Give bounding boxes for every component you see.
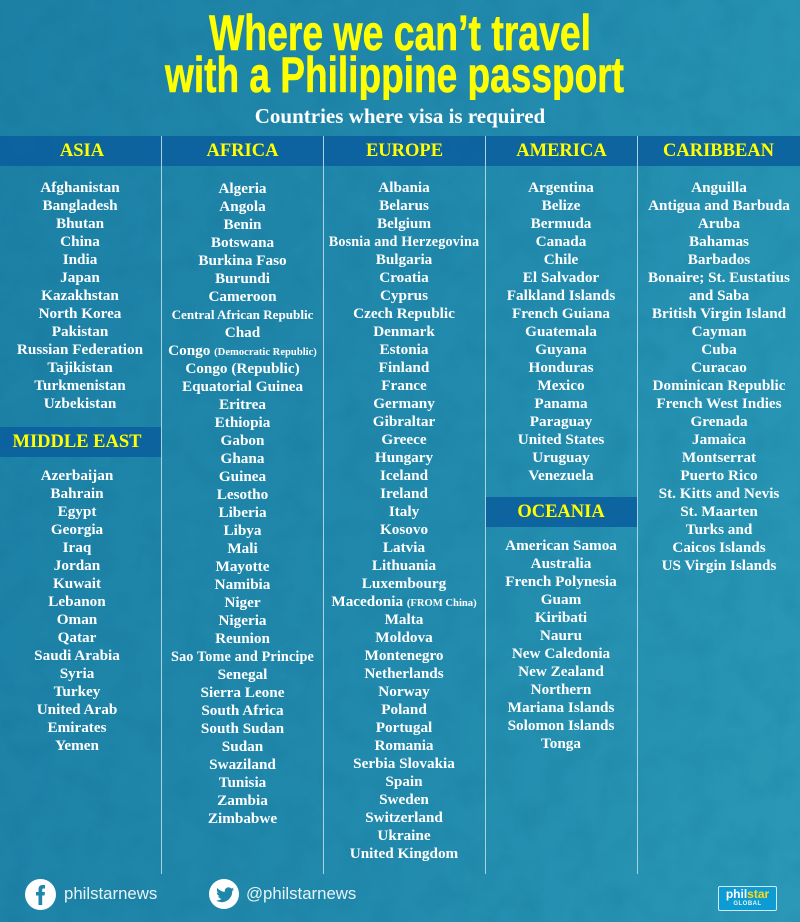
panel: Asia list: Bhutan (56, 215, 104, 232)
panel: Europe list: United Kingdom (350, 845, 458, 862)
panel: Africa list (168, 180, 317, 827)
panel: Europe list: Serbia Slovakia (353, 755, 455, 772)
panel: Oceania list: Guam (541, 591, 581, 608)
panel: America list: Belize (542, 197, 580, 214)
panel: Caribbean list: Anguilla (691, 179, 747, 196)
panel: Africa list: Sao Tome and Principe (171, 649, 314, 665)
panel: Europe list: Belarus (379, 197, 429, 214)
panel: Africa list: Niger (224, 594, 261, 611)
panel: Asia list: Uzbekistan (44, 395, 116, 412)
panel: Africa list: Zimbabwe (208, 810, 277, 827)
panel: Africa list: Equatorial Guinea (182, 378, 303, 395)
panel: Caribbean list: Turks and (686, 521, 752, 538)
panel: Europe list: Romania (374, 737, 434, 754)
panel: Europe list: Sweden (379, 791, 429, 808)
panel: Europe list: Spain (385, 773, 423, 790)
panel: America list: Guyana (535, 341, 587, 358)
panel: Africa list: Guinea (219, 468, 266, 485)
panel: America list (507, 179, 615, 484)
twitter handle: @philstarnews (246, 884, 356, 903)
panel: Europe list: Denmark (373, 323, 435, 340)
panel: Europe list (328, 179, 479, 862)
panel: Africa list: Mali (227, 540, 258, 557)
panel: Africa list: Cameroon (208, 288, 277, 305)
panel: Europe heading: EUROPE (366, 141, 443, 161)
panel: Europe list: Finland (379, 359, 429, 376)
panel: Middle East list: Oman (57, 611, 97, 628)
panel: Oceania list: American Samoa (505, 537, 617, 554)
panel: Oceania list: New Zealand (518, 663, 604, 680)
panel: Asia list: Bangladesh (42, 197, 118, 214)
panel: America list: Venezuela (528, 467, 594, 484)
panel: Africa list: Lesotho (217, 486, 268, 503)
panel: Africa list: Botswana (211, 234, 274, 251)
panel: Asia list: Pakistan (52, 323, 108, 340)
panel: Africa list: Gabon (221, 432, 264, 449)
panel: Africa list: Mayotte (216, 558, 269, 575)
panel: America list: Argentina (528, 179, 594, 196)
panel: Africa list: Namibia (215, 576, 270, 593)
panel: Africa list: Liberia (218, 504, 267, 521)
panel: Caribbean list: and Saba (689, 287, 749, 304)
panel: America list: Uruguay (532, 449, 590, 466)
panel: Oceania list: Northern (531, 681, 591, 698)
panel: Africa list: Congo (Republic) (185, 360, 300, 377)
panel: Caribbean list: Bonaire; St. Eustatius (648, 269, 790, 286)
panel: Europe list: Ireland (380, 485, 428, 502)
panel: Europe list: Montenegro (364, 647, 444, 664)
panel: Middle East list: Saudi Arabia (34, 647, 120, 664)
panel: Africa list: Tunisia (219, 774, 266, 791)
panel: America list: Bermuda (531, 215, 591, 232)
panel: Europe list: Luxembourg (362, 575, 446, 592)
panel: Europe list: Latvia (383, 539, 425, 556)
panel: Europe list: Hungary (375, 449, 433, 466)
panel: Europe list: Germany (373, 395, 435, 412)
panel: Middle East list (34, 467, 120, 754)
panel: Africa list: Swaziland (209, 756, 276, 773)
panel: Asia list: Russian Federation (17, 341, 143, 358)
icon: facebook (25, 879, 56, 910)
panel: Africa list: South Sudan (201, 720, 284, 737)
panel: Oceania heading (486, 497, 637, 527)
panel: Middle East list: Georgia (51, 521, 103, 538)
panel: Middle East heading (0, 427, 161, 457)
logo: philstar global: philstar (726, 887, 769, 901)
panel: Africa list: Chad (225, 324, 260, 341)
panel: Europe list: Estonia (380, 341, 428, 358)
panel: Europe list: Moldova (375, 629, 433, 646)
panel: Europe list: Belgium (377, 215, 431, 232)
panel: Caribbean list: St. Kitts and Nevis (659, 485, 779, 502)
panel: Caribbean list: US Virgin Islands (662, 557, 776, 574)
panel: Middle East list: Kuwait (53, 575, 101, 592)
panel: Middle East list: Iraq (63, 539, 91, 556)
panel: Europe list: Macedonia (FROM China) (331, 593, 477, 610)
panel: Europe list: Bulgaria (376, 251, 432, 268)
panel: Africa list: Burundi (215, 270, 270, 287)
panel: Africa list: Ghana (221, 450, 264, 467)
panel: Europe list: Albania (378, 179, 430, 196)
panel: America list: Canada (536, 233, 586, 250)
panel: Africa list: Algeria (218, 180, 267, 197)
facebook handle: philstarnews (64, 884, 157, 903)
panel: Asia heading: ASIA (60, 141, 104, 161)
panel: Africa list: Nigeria (218, 612, 267, 629)
panel: Middle East list: Emirates (47, 719, 107, 736)
panel: America heading: AMERICA (516, 141, 607, 161)
panel: Asia list: Turkmenistan (34, 377, 126, 394)
panel: Asia list: North Korea (39, 305, 121, 322)
panel: Caribbean list: Grenada (690, 413, 748, 430)
panel: Europe list: Kosovo (380, 521, 428, 538)
panel: Asia list: Japan (60, 269, 100, 286)
title (164, 5, 624, 100)
panel: Caribbean list: Dominican Republic (653, 377, 785, 394)
panel: Asia list: Afghanistan (40, 179, 120, 196)
panel: America list: Panama (534, 395, 588, 412)
panel: Africa list: Burkina Faso (198, 252, 287, 269)
panel: Asia list (17, 179, 143, 412)
header band (0, 136, 800, 166)
panel: Europe list: Netherlands (364, 665, 444, 682)
panel: Caribbean list: Antigua and Barbuda (648, 197, 790, 214)
panel: Africa list: South Africa (201, 702, 284, 719)
panel: Africa list: Ethiopia (215, 414, 270, 431)
panel: America list: Paraguay (530, 413, 592, 430)
panel: Caribbean list: Jamaica (692, 431, 746, 448)
subtitle: Countries where visa is required (255, 104, 545, 128)
panel: Middle East list: Egypt (58, 503, 96, 520)
panel: Africa list: Reunion (215, 630, 270, 647)
panel: Middle East list: Jordan (54, 557, 100, 574)
panel: Europe list: Italy (389, 503, 419, 520)
panel: Caribbean list: Barbados (688, 251, 750, 268)
panel: America list: Falkland Islands (507, 287, 615, 304)
panel: Africa list: Sierra Leone (201, 684, 284, 701)
panel: Africa list: Senegal (218, 666, 267, 683)
panel: Africa list: Central African Republic (172, 307, 313, 322)
panel: Africa list: Congo (Democratic Republic) (168, 342, 317, 359)
panel: Africa list: Eritrea (219, 396, 266, 413)
panel: Caribbean list: British Virgin Island (652, 305, 786, 322)
panel: Europe list: Czech Republic (353, 305, 455, 322)
panel: Europe list: Bosnia and Herzegovina (329, 234, 479, 250)
panel: Oceania list: Tonga (541, 735, 581, 752)
panel: America list: French Guiana (512, 305, 610, 322)
panel: Caribbean list: Aruba (698, 215, 740, 232)
panel: Africa list: Sudan (222, 738, 263, 755)
panel: Asia list: China (60, 233, 100, 250)
panel: Oceania heading: OCEANIA (517, 502, 605, 522)
panel: Middle East list: Syria (60, 665, 94, 682)
panel: Europe list: Greece (381, 431, 427, 448)
panel: Europe list: Lithuania (372, 557, 436, 574)
panel: Oceania list: French Polynesia (505, 573, 617, 590)
panel: Caribbean list (648, 179, 790, 574)
panel: Africa list: Benin (224, 216, 261, 233)
panel: Europe list: Iceland (380, 467, 428, 484)
panel: Europe list: Gibraltar (373, 413, 435, 430)
panel: Caribbean list: Cayman (692, 323, 746, 340)
panel: Oceania list: Kiribati (535, 609, 587, 626)
panel: America list: Guatemala (525, 323, 597, 340)
panel: Oceania list: Nauru (540, 627, 582, 644)
panel: Middle East list: Lebanon (48, 593, 106, 610)
panel: Middle East list: Turkey (54, 683, 100, 700)
panel: Middle East list: Qatar (58, 629, 96, 646)
panel: America list: United States (518, 431, 604, 448)
panel: Caribbean list: St. Maarten (680, 503, 758, 520)
panel: Caribbean list: Montserrat (682, 449, 756, 466)
panel: Europe list: Malta (385, 611, 423, 628)
panel: Europe list: Poland (381, 701, 427, 718)
panel: Europe list: France (381, 377, 427, 394)
panel: Europe list: Ukraine (377, 827, 431, 844)
panel: Middle East heading: MIDDLE EAST (12, 432, 142, 452)
panel: Oceania list: Mariana Islands (508, 699, 614, 716)
panel: Asia list: Tajikistan (47, 359, 113, 376)
panel: Europe list: Portugal (376, 719, 432, 736)
title: Where we can’t travel (209, 5, 591, 61)
panel: Africa heading: AFRICA (207, 141, 278, 161)
panel: Africa list: Zambia (217, 792, 268, 809)
logo: philstar global: GLOBAL (733, 901, 762, 907)
panel: Asia list: India (63, 251, 97, 268)
panel: America list: Mexico (537, 377, 585, 394)
panel: America list: El Salvador (523, 269, 599, 286)
panel: Caribbean list: Curacao (691, 359, 747, 376)
panel: Europe list: Norway (378, 683, 430, 700)
panel: America list: Chile (544, 251, 578, 268)
panel: Caribbean list: Caicos Islands (672, 539, 766, 556)
panel: Europe list: Switzerland (365, 809, 443, 826)
panel: Middle East list: United Arab (37, 701, 117, 718)
panel: Caribbean list: Cuba (701, 341, 737, 358)
panel: Middle East list: Bahrain (50, 485, 104, 502)
panel: Oceania list: Australia (531, 555, 591, 572)
logo: philstar global (718, 886, 777, 911)
icon: twitter (209, 879, 239, 909)
panel: Middle East list: Yemen (55, 737, 99, 754)
panel: Caribbean list: Puerto Rico (680, 467, 758, 484)
panel: Europe list: Croatia (379, 269, 429, 286)
panel: Caribbean heading: CARIBBEAN (663, 141, 774, 161)
panel: Asia list: Kazakhstan (41, 287, 119, 304)
panel: Africa list: Angola (219, 198, 266, 215)
panel: Caribbean list: French West Indies (656, 395, 782, 412)
panel: Oceania list (505, 537, 617, 752)
panel: Africa list: Libya (224, 522, 261, 539)
panel: Middle East list: Azerbaijan (41, 467, 113, 484)
panel: Europe list: Cyprus (380, 287, 428, 304)
panel: Oceania list: Solomon Islands (508, 717, 614, 734)
panel: Oceania list: New Caledonia (512, 645, 610, 662)
panel: Caribbean list: Bahamas (689, 233, 749, 250)
panel: America list: Honduras (528, 359, 594, 376)
